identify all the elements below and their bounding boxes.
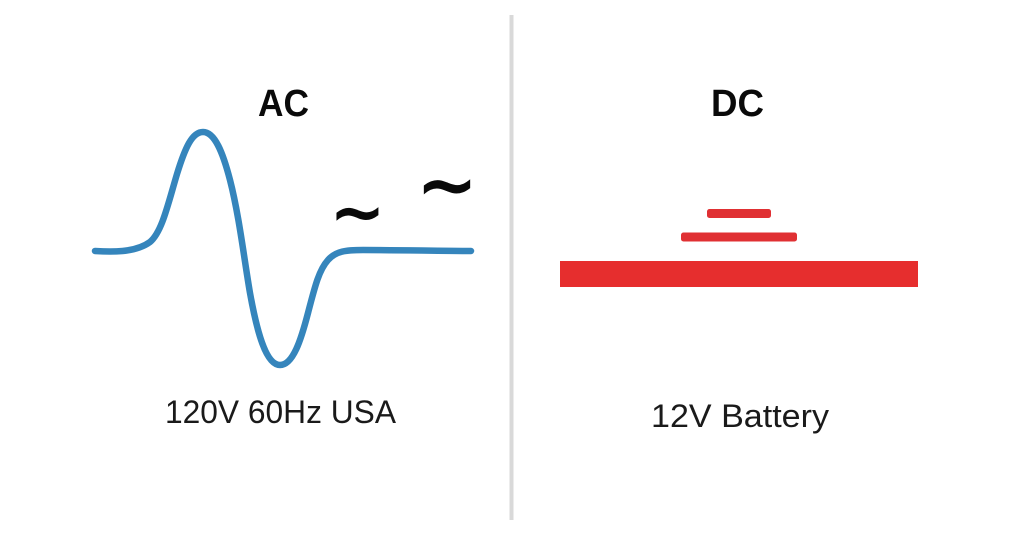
chart: AC waveform — [95, 132, 471, 365]
icon: small tilde: ~ — [329, 173, 386, 251]
label: 12V Battery: 12V Battery — [651, 398, 829, 434]
panel: AC — [95, 83, 478, 430]
panel: DC — [560, 83, 918, 434]
icon: large tilde: ~ — [416, 142, 478, 228]
chart: DC long red bar — [560, 261, 918, 287]
icon: medium red bar — [681, 232, 797, 242]
center divider — [510, 15, 514, 520]
icon: short red bar — [707, 209, 771, 218]
heading: AC: AC — [258, 83, 309, 125]
heading: DC: DC — [711, 83, 764, 125]
label: 120V 60Hz USA: 120V 60Hz USA — [165, 394, 397, 430]
